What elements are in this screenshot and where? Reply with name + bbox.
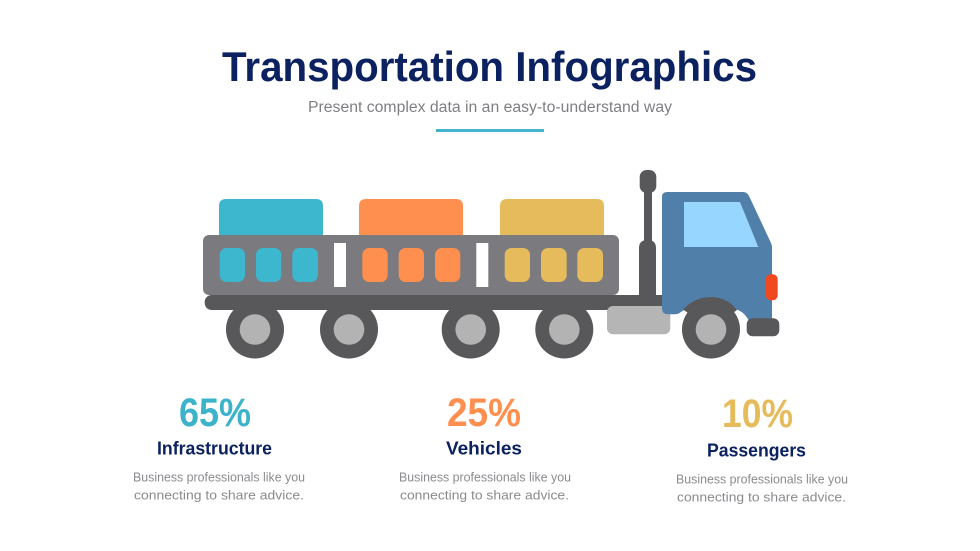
label: Passengers [707,440,806,460]
headlight [766,274,778,300]
exhaust stack [639,170,656,296]
percentage: 65% [179,391,251,435]
subtitle: Present complex data in an easy-to-understand way [308,99,672,116]
label: Vehicles [446,438,522,458]
fuel tank [607,306,670,334]
stat: vehicles [399,391,571,502]
chassis beam [205,295,675,310]
cargo box: orange [359,199,463,236]
orange windows [362,248,460,282]
cab [662,192,772,321]
percentage: 25% [447,391,521,435]
flatbed [203,235,619,295]
title: Transportation Infographics [222,43,757,90]
description: Business professionals like you [399,470,571,484]
description: Business professionals like you [133,470,305,484]
label: Infrastructure [157,438,272,458]
wheels [226,300,740,358]
teal windows [220,248,318,282]
stat: infrastructure [133,391,305,502]
cargo box: yellow [500,199,604,236]
yellow windows [505,248,603,282]
description: connecting to share advice. [677,490,846,504]
cargo box: teal [219,199,323,236]
illustration: truck [203,170,779,358]
accent rule [436,129,544,132]
flatbed slots [334,243,488,287]
bumper [747,318,779,336]
description: connecting to share advice. [400,488,569,502]
wheel arch [683,297,737,329]
description: Business professionals like you [676,472,848,486]
description: connecting to share advice. [134,488,304,502]
stat: passengers [676,392,848,504]
cab window [684,202,758,247]
percentage: 10% [722,392,793,436]
